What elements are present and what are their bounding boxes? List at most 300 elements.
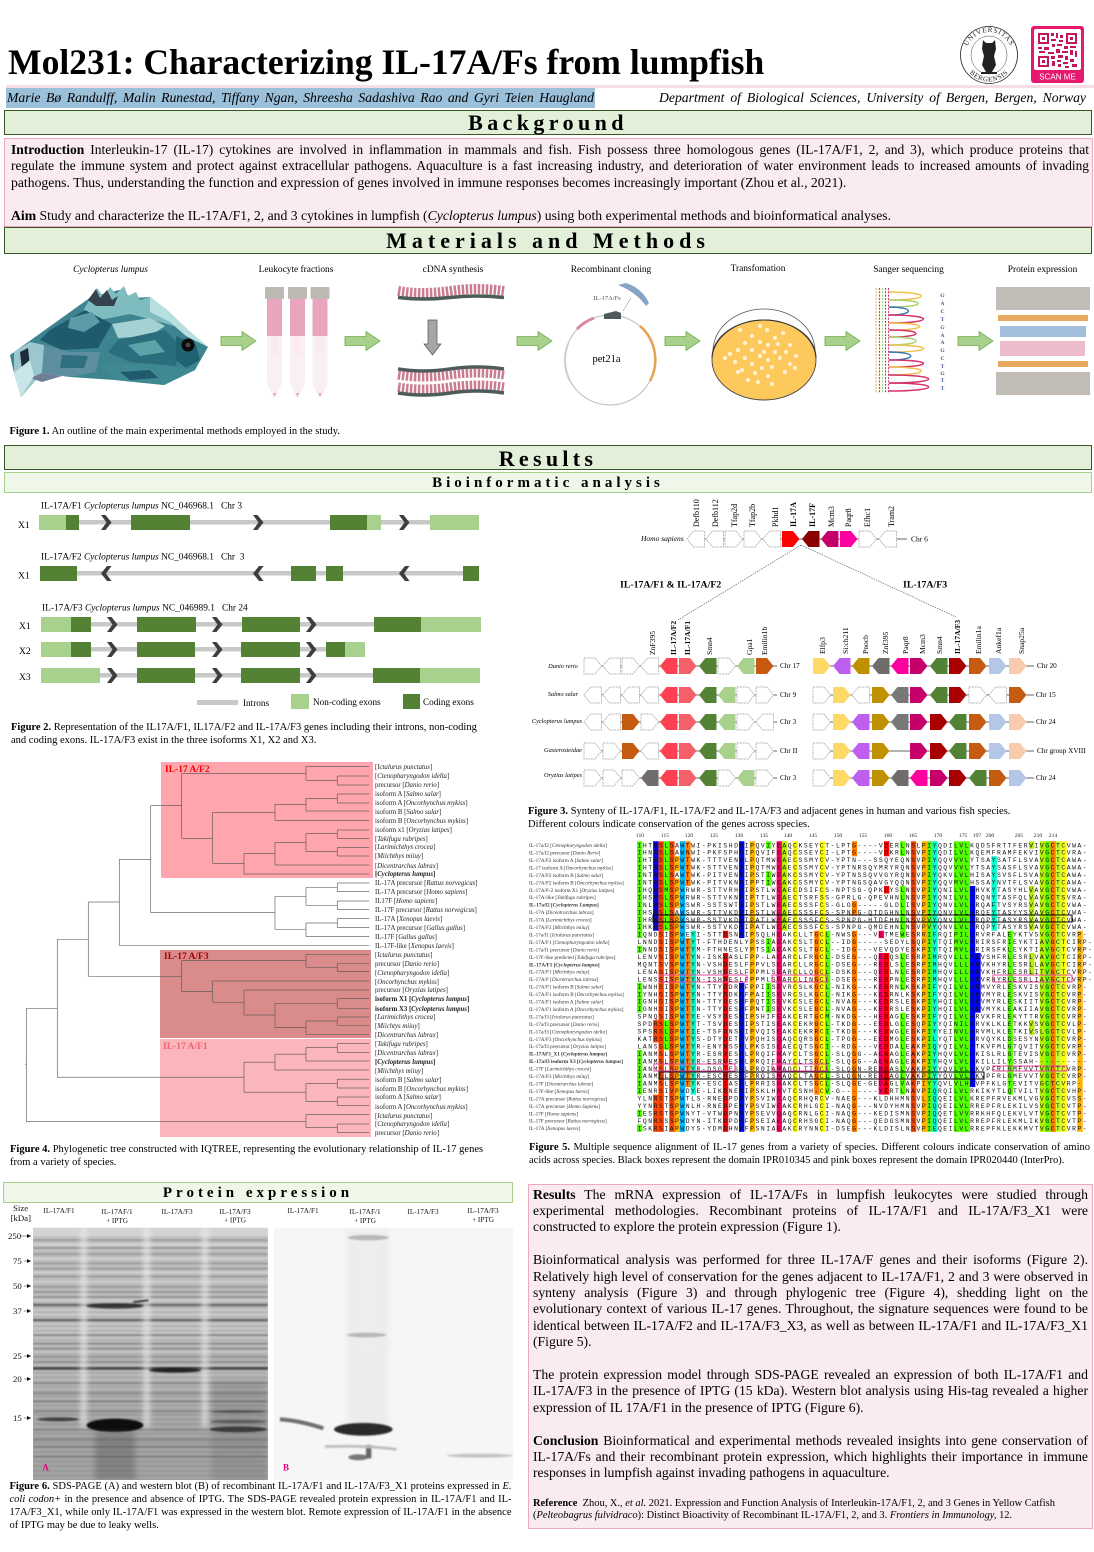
species labels: Gasterosteidae <box>544 747 582 754</box>
position ruler <box>636 833 1057 839</box>
sequence names: IL-17A/F1 isoform A [Oncorhynchus mykiss] <box>529 1006 624 1013</box>
panel: introduction and aim <box>4 138 1093 227</box>
legend: Introns <box>243 698 269 708</box>
sequence names: IL-17A/F3 [Oncorhynchus mykiss] <box>529 1037 602 1043</box>
lane labels: IL-17AF/1 <box>349 1208 381 1216</box>
sequence names: IL-17A/F1 [Ctenopharyngodon idella] <box>529 940 610 946</box>
sequence names: IL-17a/f3 [Ictalurus punctatus] <box>529 1013 594 1020</box>
tree leaf labels: isoform X3 [Cyclopterus lumpus] <box>375 1006 469 1013</box>
position ruler: 210 <box>1034 833 1042 839</box>
alignment sequences: IHTRSLSPWTWK-STTVENRIPQTMWEAECSSMYCV-YPTNRSQYMRYRQNSVPIYQQVVVLYTSAYSASFLSVAVGCTCAWA- <box>638 865 1088 872</box>
lane labels: IL-17A/F1 <box>43 1207 75 1215</box>
tree leaf labels: isoform B [Oncorhynchus mykiss] <box>375 1086 468 1093</box>
lane separators <box>81 1228 208 1428</box>
group heading: IL-17A/F3: IL-17A/F3 <box>903 580 947 590</box>
caption: figure 3: Different colours indicate conservation of the genes across species. <box>528 818 810 830</box>
human gene row: Pkhd1 <box>771 507 780 527</box>
size markers: [kDa] <box>10 1213 31 1223</box>
human gene row: Mcm3 <box>827 506 836 527</box>
gene row: Gasterosteidae: Chr group XVIII <box>1037 747 1086 755</box>
position ruler: 175 <box>959 833 967 839</box>
human gene row: Tfap2d <box>730 504 739 527</box>
sequence names: IL-17a/f1 [Ictalurus punctatus] <box>529 932 594 938</box>
sequence names: IL-17A/F1 [Miichthys miiuy] <box>529 970 590 976</box>
tree leaf labels <box>375 764 478 1137</box>
text: conclusion: IL-17A/Fs and their recombinant protein expression, which highlights their importance in immune <box>533 1449 1088 1464</box>
sequence names: IL-17a/f2 [Ctenopharyngodon idella] <box>529 842 607 849</box>
text: introduction: pathogens. Thus, understanding the function and expression of genes involved in immune responses becomes increasingly important (Zhou et al., 2021). <box>11 174 846 190</box>
left panel gene names: Emilin1b <box>760 627 769 655</box>
human gene row: Defb112 <box>711 499 720 527</box>
gene: IL-17A/F2: IL-17A/F2 Cyclopterus lumpus NC_046968.1 Chr 3 <box>41 552 245 562</box>
gene: IL-17A/F3: X2 <box>19 646 31 657</box>
sequence names: IL-17A/F2 isoform B [Salmo salar] <box>529 872 604 879</box>
icon: university of bergen seal: UNIVERSITAS <box>964 27 1014 46</box>
caption: figure 4 <box>10 1144 483 1168</box>
workflow labels: Recombinant cloning <box>571 265 652 275</box>
clade: IL-17 A/F2: IL-17 A/F2 <box>165 765 210 775</box>
illustration: sanger sequencing: G <box>940 348 945 354</box>
tree leaf labels: isoform A [Oncorhynchus mykiss] <box>375 1104 468 1111</box>
alignment sequences: LNNDSISPWTYT-FTHDENLYPSSIAEAKCSLTGCL--IDG-----SEDYLSQPIYTQIMVLRRIRSFRIEYKTIAVGCTCIRP- <box>638 939 1094 946</box>
position ruler: 150 <box>834 833 842 839</box>
right panel gene names: Si:ch211 <box>841 627 850 654</box>
left panel gene names: IL-17A/F1 <box>683 621 692 655</box>
illustration: sanger sequencing <box>876 288 945 393</box>
right panel gene names: Emilin1a <box>974 626 983 654</box>
position ruler: 197 <box>973 833 981 839</box>
illustration: sanger sequencing: T <box>941 317 945 323</box>
right panel gene names: Snap25a <box>1017 627 1026 654</box>
text: results: constructed to explore the protein expression (Figure 1). <box>533 1219 841 1234</box>
panel B: western blot <box>274 1228 513 1480</box>
text: bioinformatical analysis: (Figure 5). <box>533 1334 592 1349</box>
text: protein expression model: IL-17A/F3 in the presence of IPTG (15 kDa). Western blot analysis using His-tag revealed a higher <box>533 1383 1088 1398</box>
alignment sequences: IYNHSISPWTYN-TTYDDKRFPAIISEVRCSLKGCL-NIKG---KEDRNLKSKPIFYQILVLKKVMYRLESKVISVGCTCVRP- <box>638 991 1088 998</box>
gene row: Danio rerio: Chr 20 <box>1037 662 1057 670</box>
species labels: Oryzias latipes <box>544 772 583 779</box>
sequence names: IL-17A/F3 [Miichthys miiuy] <box>529 1074 590 1080</box>
title: Mol231: Characterizing IL-17A/Fs from lumpfish <box>8 42 764 82</box>
gene: IL-17A/F3: X1 <box>19 621 31 632</box>
tree leaf labels: precursor [Danio rerio] <box>375 1130 439 1137</box>
size markers: Size <box>13 1203 28 1213</box>
tree leaf labels: IL-17A precursor [Rattus norvegicus] <box>375 880 478 887</box>
size markers: 20 <box>13 1374 22 1384</box>
lane labels <box>43 1207 499 1225</box>
alignment sequences: SPDRSLSPWTYT-TSVDESRIPSTISEAKCEKRGCL-TKDG---EEDLGLESQPIYYQINILRRVKLKLETKKVSVGCTCVLP- <box>638 1021 1088 1028</box>
protein bands <box>38 1300 267 1432</box>
position ruler: 165 <box>909 833 917 839</box>
icon: university of bergen seal <box>960 26 1018 84</box>
alignment sequences: IHTRSLSPWTWK-TTTVENRLPQTMWEAECSSMYCV-YPTN---SSQYEQNSVPIYQQVVVLYTSAYSATFLSVAVGCTCAWA- <box>638 857 1088 864</box>
header divider <box>6 85 1094 88</box>
figure 2: gene structures <box>18 502 481 709</box>
text: introduction: regulate the immune system and protect against extracellular pathogens. Aquaculture is a fast increasing industry, and deterioration of water environment leads to increased amounts of invading <box>11 158 1089 173</box>
tree leaf labels: [Larimichthys crocea] <box>375 1014 435 1021</box>
size markers <box>8 1203 31 1423</box>
clade: IL-17 A/F3: IL-17 A/F3 <box>164 952 209 962</box>
tree leaf labels: IL-17A precursor [Homo sapiens] <box>375 889 467 896</box>
sequence names: IL-17a/f3 isoform X3 [Cyclopterus lumpus] <box>529 1059 623 1065</box>
position ruler: 120 <box>685 833 693 839</box>
alignment sequences: KATRSLSPWTYS-DTYDETRVPQHISQAQCQRSGCL-TPGG---EEDMGLESKPILYQTLVLRRVQYKLDSESYNVGCTCVRP- <box>638 1036 1088 1043</box>
illustration: sanger sequencing: A <box>941 340 945 346</box>
text: bioinformatical analysis: evolutionary context of various IL-17 genes. Throughout, the signature sequences were found to be <box>533 1301 1088 1316</box>
sequence names: IL-17a/f1 precursor [Danio rerio] <box>529 946 599 953</box>
alignment sequences: INLRSLSPWSWR-SSTSWTRIPSTLWEAECSSSFCS-GLOG-----GLDLISVPIYQNVLVLNRQAFTVSYRSVAVGCTCVWA- <box>638 902 1088 909</box>
lane labels: IL-17A/F1 <box>287 1207 319 1215</box>
species labels <box>532 663 583 779</box>
illustration: sanger sequencing: A <box>941 301 945 307</box>
tree leaf labels: IL-17F-like [Xenopus laevis] <box>375 943 454 950</box>
text: results <box>533 1186 1088 1234</box>
alignment sequences: IHQRSMSPWRWR-STTVRHRIPSTLWEAECDSIFCS-NPTSG-QPKDYSLNSVPIYQNILVLNHVKYTASYHLVAVGCTCVWA- <box>638 887 1088 894</box>
tree leaf labels: [Cyclopterus lumpus] <box>375 1059 435 1066</box>
gene row: Cyclopterus lumpus <box>584 714 1056 730</box>
left panel gene names: ZnF395 <box>648 631 657 655</box>
sequence names: IL-17a/f3 precursor [Danio rerio] <box>529 1021 599 1028</box>
text: conclusion <box>533 1433 1088 1480</box>
lane labels: IL-17A/F3 <box>467 1207 499 1215</box>
alignment sequences: FQNRSSSPWDYN-ITKDPDRFPSEIAEAQCRHSGCI-NAQG---QEDGSMNSVPIQQEILVLRREPFRLEKMLIKVGCTCVTP- <box>638 1118 1088 1125</box>
illustration: cDNA synthesis <box>398 289 504 395</box>
sequence names: IL-17a/f3 precursor [Oryzias latipes] <box>529 1043 606 1050</box>
position ruler: 140 <box>784 833 792 839</box>
affiliation: Department of Biological Sciences, University of Bergen, Bergen, Norway <box>659 90 1086 105</box>
tree leaf labels: precursor [Danio rerio] <box>375 961 439 968</box>
legend: Non-coding exons <box>313 697 381 707</box>
sequence names: IL-17A-like [Takifugu rubripes] <box>529 894 596 901</box>
illustration: sanger sequencing: C <box>941 309 945 315</box>
gene row: Danio rerio <box>584 658 1057 674</box>
position ruler: 170 <box>934 833 942 839</box>
caption: figure 2: and coding exons. IL-17A/F3 exist in the three isoforms X1, X2 and X3. <box>11 734 316 746</box>
tree leaf labels: [Ictalurus punctatus] <box>375 764 432 771</box>
tree leaf labels: [Larimichthys crocea] <box>375 844 435 851</box>
gene: IL-17A/F3: X3 <box>19 672 31 683</box>
tree leaf labels: [Takifugu rubripes] <box>375 836 428 843</box>
alignment sequences: IHTRSLSAWTWI-PKISHDRIPQVIYEAQCKSEYCT-LPTG----VDERLNSLPIYQDILVLKQDSFRTTFERVIVGCTCVWA- <box>638 842 1088 849</box>
left panel gene names <box>648 621 769 655</box>
arrow 4 <box>665 332 700 350</box>
right panel gene names: Paqr8 <box>901 636 910 654</box>
species labels: Salmo salar <box>548 691 579 698</box>
size markers: 37 <box>13 1306 22 1316</box>
gene row: Gasterosteidae <box>584 743 1086 759</box>
zoom connectors <box>678 545 956 620</box>
illustration: petri dish <box>712 309 816 400</box>
tree leaf labels: [Dicentrarchus labrax] <box>375 1050 438 1057</box>
tree leaf labels: IL-17A precursor [Gallus gallus] <box>375 925 465 932</box>
caption: figure 4: from a variety of species. <box>10 1156 116 1168</box>
illustration: sanger sequencing: G <box>940 371 945 377</box>
position ruler: 135 <box>760 833 768 839</box>
arrow 2 <box>345 332 380 350</box>
sequence names: IL-17A/F [Dicentrarchus labrax] <box>529 977 599 983</box>
tree leaf labels: isoform A [Salmo salar] <box>375 791 441 798</box>
sequence names: IL-17F [Larimichthys crocea] <box>529 1067 591 1073</box>
position ruler: 160 <box>884 833 892 839</box>
alignment sequences: IESRSTSPWNYT-VTWDPNRYPSEVVQAQCRNLGCI-NAQG---KEDISMNSVPIQQETLVVRRKHFQLEKVLVTVGCTCVTP- <box>638 1110 1088 1118</box>
illustration: sanger sequencing: T <box>941 364 945 370</box>
alignment sequences: IANMSLSPWTYR-ESRVESRLPRQIFHAYCLTSGCL-SLQGG--AENAGLEAKPIYHQVLVLHKILLILYSSAH---------- <box>638 1058 1088 1065</box>
position ruler: 155 <box>859 833 867 839</box>
alignment sequences: IQNDSISPWEYI-STTDSNRIPSQLHEAKCLLTGCL-NWSG---VETMEWESRRIFRQIPILQRVRFALEYKTVSVGCTCVRP- <box>638 932 1088 939</box>
alignment sequences: YYNRSTSPWNLH-RNEDPERYPSVIWEAKCRHLGCI-NAQG---NVDYHMNSVPIQQEILVLRREPFRLEKILVSVGCTCVTP- <box>638 1103 1088 1110</box>
sequence names: IL-17A/F1 [Cyclopterus lumpus] <box>529 962 600 968</box>
human gene row: IL-17F <box>808 503 817 527</box>
caption: figure 5 <box>529 1142 1090 1166</box>
gene row: Cyclopterus lumpus: Chr 24 <box>1036 718 1056 726</box>
position ruler: 145 <box>809 833 817 839</box>
human gene row: Tram2 <box>887 506 896 527</box>
lane labels: IL-17A/F3 <box>161 1208 193 1216</box>
sequence names: IL-17A/F-2 isoform X1 [Oryzias latipes] <box>529 887 615 894</box>
tree branches <box>25 767 369 1133</box>
text: reference <box>533 1498 1055 1521</box>
illustration: leukocyte tubes <box>265 287 330 397</box>
tree leaf labels: isoform A [Salmo salar] <box>375 1094 441 1101</box>
alignment sequences: IGNHSISPWTTN-TTYDESRFPNTISEVKCSLEGCL-NVAG---KEDRSLESKPIYHQILVLRKVMYKLEAKIIAVGCTCVRP- <box>638 1006 1088 1013</box>
tree leaf labels: [Ctenopharyngodon idella] <box>375 970 449 977</box>
sequence names: IL-17 isoform A [Oncorhynchus mykiss] <box>529 864 613 871</box>
species labels: Cyclopterus lumpus <box>532 718 583 725</box>
tree leaf labels: precursor [Danio rerio] <box>375 782 439 789</box>
gene row: Salmo salar: Chr 15 <box>1036 691 1056 699</box>
tree leaf labels: isoform B [Salmo salar] <box>375 809 441 816</box>
sequence names: IL-17A [Xenopus laevis] <box>529 1126 581 1132</box>
size markers: 250 <box>8 1231 22 1241</box>
caption: figure 6: 17A/F3_X1, while only IL-17A/F1 was expressed in the western blot. Remote expression of IL-17A/F1 in the absence <box>10 1507 512 1518</box>
heading: background <box>4 110 1092 135</box>
alignment sequences: LENASISPWTYN-VSHDESLFPPMLSEARCLLQGCL-DSKG---QEDLNLESRPIMHQVLLLRRVKHFRLESRLITVGCTCVRP- <box>638 969 1094 976</box>
caption: figure 5: Figure 5. Multiple sequence alignment of IL-17 genes from a variety of species. Different colours indicate conservation of amino <box>529 1142 1090 1152</box>
gene: IL-17A/F2 <box>18 552 479 582</box>
alignment sequences: LENVSISPWTYN-ISKDASLFPP-LAEARCLFRGCL-DSEG---QEDQSLESRPIMRQVLLLRKVSHFRLESRLVAVGCTCIRP- <box>638 954 1094 961</box>
gene row: Cyclopterus lumpus: Chr 3 <box>780 718 797 726</box>
human gene row: Chr 6 <box>911 534 928 544</box>
text: protein expression model: The protein expression model through SDS-PAGE revealed an expression of both IL-17A/F1 and <box>533 1367 1088 1382</box>
alignment sequences: IANMSLSPWTYR-ESRVESRLPRQIFHAYCLTSGCL-SLQGG--AENAGLEAKPIYHQVLVLHKISLRLGTEVISVGCTCVRP- <box>638 1051 1088 1058</box>
sequence names <box>529 842 624 1132</box>
text: protein expression model <box>533 1367 1088 1415</box>
illustration: sanger sequencing: C <box>941 356 945 362</box>
clade: IL-17 A/F3 <box>160 950 371 1038</box>
sequence names: IL-17F precursor [Rattus norvegicus] <box>529 1119 607 1125</box>
alignment sequences: IANMSLSPWTYK-ESCIASRLPRRISHAKCLTSGCL-SLQGE-GEDAGLVAKPIYYQVLVLHKVPFKLGTEVITVGCTCVRP- <box>638 1081 1083 1088</box>
gene: IL-17A/F3 <box>19 604 481 683</box>
lane labels: + IPTG <box>106 1217 128 1225</box>
sequence names: IL-17A/F2 [Miichthys miiuy] <box>529 925 590 931</box>
tree leaf labels: [Ictalurus punctatus] <box>375 1113 432 1120</box>
clade: IL-17 A/F2 <box>161 762 373 878</box>
text: aim: Aim Study and characterize the IL-17A/F1, 2, and 3 cytokines in lumpfish (Cyclopterus lumpus) using both experimental methods and bioinformatical analyses. <box>11 208 891 222</box>
alignment sequences: IHSRSLSAWSWR-STTVKDRIPSTLWEAECSSSFCS-SPNPG-QTDGHNLNSVPIYQNVLVLNRQEYTASYYSVAVGCTCVWA- <box>638 909 1088 916</box>
tree leaf labels: [Miichthys miiuy] <box>375 853 423 860</box>
sequence names: IL-17A/F1 isoform A [Salmo salar] <box>529 998 603 1006</box>
gene row: Salmo salar <box>584 687 1056 703</box>
lane labels: IL-17AF/1 <box>101 1208 133 1216</box>
illustration: sanger sequencing: A <box>941 333 945 339</box>
clade: IL-17 A/F1 <box>160 1039 371 1137</box>
gene: IL-17A/F1 <box>18 502 479 531</box>
gene row: Oryzias latipes <box>584 770 1056 786</box>
legend: Coding exons <box>423 697 474 707</box>
arrow 3 <box>517 332 552 350</box>
tree leaf labels: IL17F [Homo sapiens] <box>375 898 437 905</box>
right panel gene names: Ankef1a <box>994 627 1003 654</box>
alignment sequences: ISKRSIAPWDYS-YDMDHNRFPSNIAEAKCRYNNCI-DSEG---KLDISLNSVPIEQEILVLRREPFKLEKKMVTVGCTCVRP- <box>638 1125 1088 1132</box>
position ruler: 205 <box>1015 833 1023 839</box>
workflow labels: Cyclopterus lumpus <box>73 265 148 275</box>
figure 1: workflow <box>10 263 1090 406</box>
lane labels: + IPTG <box>472 1216 494 1224</box>
tree leaf labels: [Miichthys miiuy] <box>375 1068 423 1075</box>
alignment sequences: IHNRSLSAWNWI-PKFSPHRIPQVIFEAQCSSEYCI-LPTG----VDKRLNSVPIYQDILVLKQEMFRAMFEKVIVGCTCVRA- <box>638 850 1088 857</box>
gene: IL-17A/F1: X1 <box>18 520 30 531</box>
human gene row: Homo sapiens <box>640 534 684 543</box>
workflow labels: Sanger sequencing <box>873 265 944 275</box>
text: bioinformatical analysis: synteny analysis (Figure 3) and through phylogenic tree (Figure 4), shedding light on the <box>533 1285 1088 1300</box>
tree leaf labels: IL-17F precursor [Rattus norvegicus] <box>375 907 477 914</box>
caption: figure 4: Figure 4. Phylogenetic tree constructed with IQTREE, representing the evolutionary relationship of IL-17 genes <box>10 1144 483 1154</box>
icon: QR code scan me <box>1031 26 1084 83</box>
human gene row <box>640 499 928 547</box>
alignment sequences: IHRRSLSPWSWR-SSTVKDRIPATLWEAECSSSFCS-SPNPG-HTDFHNLNSVPVYQNVLVLTRQPYTASYRSVAVGCTCVWA- <box>638 917 1088 924</box>
lane labels: IL-17A/F3 <box>407 1208 439 1216</box>
caption: figure 6: of IPTG may be due to leaky wells. <box>10 1520 159 1531</box>
caption: figure 6: coli codon+ in the presence and absence of IPTG. The SDS-PAGE revealed protein expression in IL-17A/F1 and IL- <box>10 1494 512 1505</box>
workflow labels: cDNA synthesis <box>423 265 484 275</box>
illustration: sanger sequencing: G <box>940 325 945 331</box>
tree leaf labels: [Ctenopharyngodon idella] <box>375 1121 449 1128</box>
text: bioinformatical analysis: identical between IL-17A/F2 and IL-17A/F3_X3, as well as between IL-17A/F1 and IL-17A/F3_X1 <box>533 1318 1088 1333</box>
gene row: Gasterosteidae: Chr II <box>780 747 798 755</box>
subheading: bioinformatic analysis <box>4 472 1092 493</box>
text: results: experimental methodologies. Recombinant proteins of IL-17A/F1 and IL-17A/F3_X1 were <box>533 1203 1088 1218</box>
right panel gene names: Pnocb <box>861 635 870 654</box>
figure 5: multiple sequence alignment <box>529 833 1094 1132</box>
right panel gene names: IL-17A/F3 <box>953 620 962 654</box>
gene row: Oryzias latipes: Chr 3 <box>780 774 797 782</box>
caption: figure 2: Figure 2. Representation of the IL17A/F1, IL17A/F2 and IL-17A/F3 genes including their introns, non-coding <box>11 722 477 732</box>
text: bioinformatical analysis: Bioinformatical analysis was performed for three IL-17A/F genes and their isoforms (Figure 2). <box>533 1252 1088 1267</box>
text: bioinformatical analysis <box>533 1252 1088 1349</box>
arrow 5 <box>825 332 860 350</box>
tree leaf labels: isoform A [Oncorhynchus mykiss] <box>375 800 468 807</box>
human gene row: Efhc1 <box>863 508 872 527</box>
sequence names: IL-17F [Dicentrarchus labrax] <box>529 1082 593 1088</box>
text: results: Results The mRNA expression of IL-17A/Fs in lumpfish leukocytes were studied through <box>533 1186 1088 1202</box>
tree leaf labels: [Ctenopharyngodon idella] <box>375 773 449 780</box>
text: conclusion: responses in lumpfish against invading pathogens in aquaculture. <box>533 1465 890 1480</box>
group heading: IL-17A/F1 and F2: IL-17A/F1 & IL-17A/F2 <box>620 580 721 590</box>
workflow labels: Leukocyte fractions <box>259 264 334 275</box>
arrow 6 <box>958 332 993 350</box>
clade: IL-17 A/F1: IL-17 A/F1 <box>163 1042 208 1052</box>
tree leaf labels: isoform X1 [Cyclopterus lumpus] <box>375 996 469 1003</box>
gene row: Salmo salar: Chr 9 <box>780 691 797 699</box>
tree leaf labels: [Cyclopterus lumpus] <box>375 871 435 878</box>
caption: figure 6: Figure 6. SDS-PAGE (A) and western blot (B) of recombinant IL-17A/F1 and IL-17A/F3_X1 proteins expressed in E. <box>10 1481 512 1492</box>
human gene row: Paqr8 <box>844 508 853 527</box>
tree leaf labels: IL-17A [Xenopus laevis] <box>375 916 442 923</box>
size markers: 25 <box>13 1351 22 1361</box>
right panel gene names: Smn4 <box>935 636 944 654</box>
subheading: protein expression: Protein expression <box>163 1185 353 1201</box>
position ruler: 115 <box>661 833 669 839</box>
lane labels: IL-17A/F3 <box>219 1208 251 1216</box>
alignment sequences: IHSRSLSPWRWR-STTVKNRIPTTLWEAECTSRFSS-GPRLG-QPEVHNLNSVPIYQNILVLTRQNYTASFQLVAVGCTSVRA- <box>638 894 1088 901</box>
alignment sequences: LENSSISPWTYN-ISHDESLFPPMLSEARCLINGCL-DSEG---REDPNLESRPIMHQVLLLRRVRHYRLESRLIAVGCTCVRP- <box>638 976 1094 983</box>
illustration: protein expression layers <box>996 287 1090 395</box>
illustration: sanger sequencing: T <box>941 378 945 384</box>
icon: QR code scan me: SCAN ME <box>1039 72 1076 82</box>
text: reference: (Pelteobagrus fulvidraco): Distinct Bioactivity of Recombinant IL-17A/F1, 2, and 3. Frontiers in Immunology, 12. <box>533 1510 1012 1521</box>
alignment sequences: MQNTSVSPWTYN-VSHDESLFPPVLSEARCLLRGCL-DSEG---REDLSLESRPIMHQVLLLRRVKHYRLESRLLAVGCTCIRP- <box>638 962 1094 968</box>
heading: results: Results <box>499 446 597 471</box>
alignment sequences: IGNHSISPWTTN-TTYDESRFPQTISEVKCSLEGCL-NVAG---KEDRSLESKPIYHQILVLRKVMYRLESKIITVGCTCVRP- <box>638 999 1088 1006</box>
figure 3: synteny <box>532 499 1086 786</box>
tree leaf labels: [Dicentrarchus labrax] <box>375 863 438 870</box>
figure 6: gels <box>8 1203 514 1480</box>
right panel gene names: Znf395 <box>881 631 890 654</box>
gene: IL-17A/F3: IL-17A/F3 Cyclopterus lumpus NC_046989.1 Chr 24 <box>42 604 248 614</box>
alignment sequences: INTRSLSPWTWK-PITVKNRIPPTIWEAKCSSMYCV-YPTNGSQAVGYQQNSVPIYQQVMVLHSSAYNVTFLSVAVGCTCAWA- <box>638 880 1088 886</box>
sequence names: IL-17A/F2 isoform B [Oncorhynchus mykiss] <box>529 879 624 886</box>
illustration: plasmid <box>565 283 655 405</box>
alignment sequences <box>638 842 1094 1132</box>
alignment sequences: IWNHSISPWTYN-TTYDDRRFPPIISEVRCSLKGCL-NIKG---KEDRNLKSKPIFYQILVLKRMVYRLESKVISVGCTCVRP- <box>638 984 1088 991</box>
sequence names: IL-17A precursor [Rattus norvegicus] <box>529 1096 608 1102</box>
sequence names: IL-17AF3_X1 [Cyclopterus lumpus] <box>529 1052 607 1058</box>
subheading: protein expression <box>3 1182 513 1203</box>
alignment sequences: IENRSIVPWDYE-LIKDNERIPSKLHNVTCSNH-CV-G-------YERTLNAVPIQRQILVLRKIKYTLQTVILTVGCTCVHP- <box>638 1088 1088 1095</box>
workflow labels <box>73 263 1078 275</box>
tree leaf labels: IL-17F [Gallus gallus] <box>375 934 437 941</box>
panel A: SDS-PAGE gel <box>33 1228 268 1480</box>
human gene row: IL-17A <box>789 502 798 527</box>
gene: IL-17A/F1: IL-17A/F1 Cyclopterus lumpus NC_046968.1 Chr 3 <box>41 502 242 512</box>
workflow labels: Protein expression <box>1008 265 1078 275</box>
sequence names: IL-17a/f3 [Ctenopharyngodon idella] <box>529 1028 607 1035</box>
sequence names: IL-17A/F2 isoform A [Salmo salar] <box>529 857 603 864</box>
text: conclusion: Conclusion Bioinformatical and experimental methods revealed insights into gene conservation of <box>533 1433 1088 1448</box>
tree leaf labels: [Dicentrarchus labrax] <box>375 1032 438 1039</box>
text: introduction <box>11 142 1089 190</box>
sequence names: IL-17F-like predicted [Takifugu rubripes] <box>529 954 616 961</box>
left panel gene names: IL-17A/F2 <box>669 621 678 655</box>
illustration: lumpfish <box>10 286 208 397</box>
domain boxes <box>653 915 1072 1079</box>
illustration: plasmid: pet21a <box>592 354 621 365</box>
position ruler: 125 <box>710 833 718 839</box>
conservation colour columns <box>637 841 1083 1132</box>
panel: results and conclusion <box>528 1184 1093 1529</box>
heading: results <box>4 445 1092 470</box>
alignment sequences: SPSRSLSPWTIE-TSFDNSRIPVQISEAKCEKRRCI-TKDG---KEDWGLESKPIYYEINVLRRVMLKLETKIVSLGCTCVLP- <box>638 1028 1088 1036</box>
text: protein expression model: expression of IL 17A/F1 in the presence of IPTG (Figure 6). <box>533 1400 864 1415</box>
caption: figure 2 <box>11 722 477 746</box>
human gene row: Defb110 <box>692 499 701 527</box>
alignment sequences: IANMSLSPWTYR-ESCMESRFPRQISHAQCLTAGCL-SLQGN-RENDAGLVAKPIYYQVLVLHKVPFRLGMEVVTVGCTCVRP- <box>638 1073 1088 1080</box>
lane labels: + IPTG <box>224 1216 246 1224</box>
tree leaf labels: [Oncorhynchus mykiss] <box>375 979 439 986</box>
tree leaf labels: [Takifugu rubripes] <box>375 1041 428 1048</box>
sequence names: IL-17A [Dicentrarchus labrax] <box>529 910 594 916</box>
gene: IL-17A/F2: X1 <box>18 570 30 582</box>
